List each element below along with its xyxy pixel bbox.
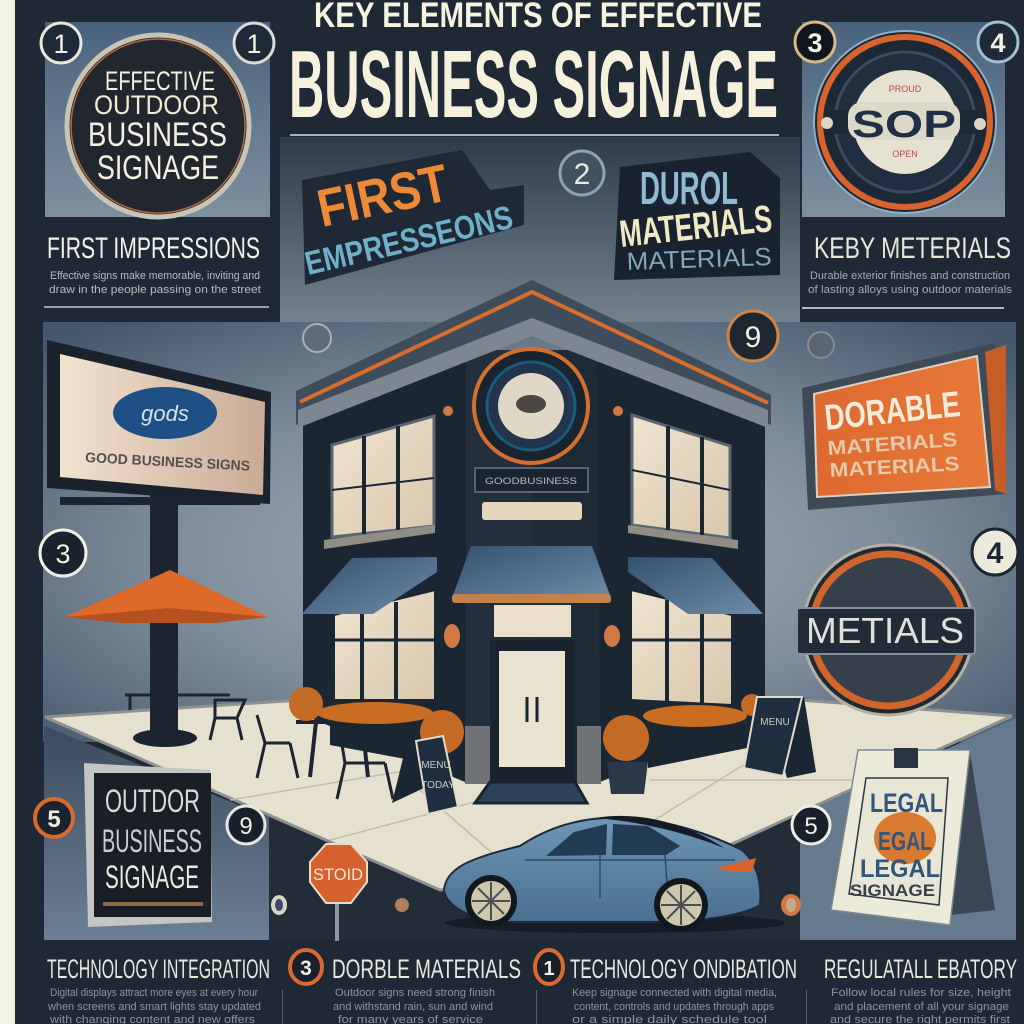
a-frame sign left: MENU xyxy=(421,760,451,771)
emblem: shop seal: OPEN xyxy=(892,149,918,159)
number badge 3 left: 3 xyxy=(55,539,71,569)
building walls xyxy=(303,362,765,782)
planter left xyxy=(289,687,465,770)
sign: first impressions: EMPRESSEONS xyxy=(301,198,516,282)
emblem: shop seal: SOP xyxy=(852,104,956,146)
column divider xyxy=(536,990,537,1024)
body text: of lasting alloys using outdoor materials xyxy=(808,284,1013,296)
awning left xyxy=(302,557,437,614)
car xyxy=(444,816,785,933)
body text: Durable exterior finishes and construction xyxy=(810,270,1010,282)
sign: durable materials: MATERIALS xyxy=(618,198,774,256)
board text: GOOD BUSINESS SIGNS xyxy=(85,449,250,474)
title xyxy=(289,0,779,138)
sign: metials round xyxy=(797,545,975,715)
sign: legal signage a-frame: LEGAL xyxy=(860,855,940,883)
number badge 5 right: 5 xyxy=(804,813,818,840)
fascia sign: GOODBUSINESS xyxy=(485,476,577,486)
upper window left xyxy=(332,416,434,537)
oval logo xyxy=(113,387,217,439)
sign: legal signage a-frame: EGAL xyxy=(878,826,932,856)
a-frame sign right xyxy=(744,697,816,778)
panel: key materials xyxy=(795,22,1018,309)
emblem: effective outdoor business signage: SIGNAGE xyxy=(97,149,219,187)
column: regulatory: and placement of all your signage xyxy=(834,1001,1009,1013)
column divider xyxy=(282,990,283,1024)
door lines xyxy=(525,855,735,898)
panel: outdoor signage lower left xyxy=(44,726,269,940)
badge backdrop xyxy=(802,22,1005,217)
sign: durable materials: DUROL xyxy=(640,162,738,214)
corner shading left xyxy=(466,350,532,780)
car windows xyxy=(546,824,607,856)
sign: legal signage a-frame xyxy=(831,748,995,925)
emblem: effective outdoor business signage: EFFECTIVE xyxy=(105,66,215,96)
sign: durable materials orange: MATERIALS xyxy=(827,429,958,460)
emblem: effective outdoor business signage: BUSINESS xyxy=(88,116,227,154)
small bolt left xyxy=(303,324,331,352)
patio pavement xyxy=(45,700,1012,890)
small bolt right xyxy=(808,332,834,358)
sign: metials round: METIALS xyxy=(806,610,964,651)
sign: outdoor business signage xyxy=(84,763,212,927)
doormat xyxy=(475,782,587,803)
number badge 1 right: 1 xyxy=(246,29,262,59)
column: durable materials: Outdoor signs need strong finish xyxy=(335,987,495,999)
number badge 9: 9 xyxy=(239,813,253,840)
a-frame sign left xyxy=(392,736,458,814)
title rule xyxy=(290,134,779,136)
sign: durable materials orange xyxy=(802,343,1006,510)
sign: outdoor business signage: BUSINESS xyxy=(102,823,202,859)
fascia sign xyxy=(475,468,588,520)
sign: outdoor business signage: OUTDOR xyxy=(105,783,200,819)
awning right xyxy=(628,557,763,614)
number badge 5 left xyxy=(35,799,73,837)
sign: first impressions: FIRST xyxy=(312,154,454,239)
small bolts lower xyxy=(271,894,801,916)
body text xyxy=(49,270,261,296)
number badge 5 right xyxy=(792,806,830,844)
panel: lower right xyxy=(800,718,1016,940)
number badge 4 xyxy=(978,22,1018,62)
number badge 4 right xyxy=(972,529,1018,575)
body text: draw in the people passing on the street xyxy=(49,284,261,296)
column: regulatory xyxy=(824,954,1017,1024)
number badge 1 xyxy=(535,950,563,984)
number badge 1 right xyxy=(234,23,274,63)
panel: central backdrop xyxy=(280,137,800,327)
number badge 9 xyxy=(227,806,265,844)
window sill left xyxy=(324,525,435,549)
badge backdrop xyxy=(45,22,270,217)
number badge 9 top centre: 9 xyxy=(745,321,761,354)
panel: lower centre road xyxy=(269,814,800,940)
sign: durable materials: MATERIALS xyxy=(626,243,772,276)
outdoor furniture left xyxy=(125,695,393,799)
heading: FIRST IMPRESSIONS xyxy=(47,232,260,265)
stop sign: STOID xyxy=(313,865,363,884)
number badge 1: 1 xyxy=(543,958,555,980)
billboard xyxy=(47,340,271,747)
column: technology integration left: when screens and smart lights stay updated xyxy=(47,1001,261,1013)
wheels xyxy=(468,878,705,929)
number badge 2: 2 xyxy=(574,158,590,191)
emblem: effective outdoor business signage xyxy=(67,35,249,217)
number badge 3 left xyxy=(40,530,86,576)
sign: legal signage a-frame: SIGNAGE xyxy=(850,881,935,900)
number badge 9 top centre xyxy=(728,311,778,361)
number badge 5 left: 5 xyxy=(47,806,61,833)
sign: durable materials xyxy=(614,152,780,280)
a-frame sign right: MENU xyxy=(760,717,790,728)
emblem: shop seal xyxy=(814,31,996,213)
door xyxy=(490,604,575,780)
number badge 3: 3 xyxy=(807,28,823,58)
awning centre xyxy=(452,546,611,603)
pavement joints xyxy=(230,730,860,860)
column: technology ondination: Keep signage connected with digital media, xyxy=(572,987,777,999)
number badge 4 right: 4 xyxy=(987,537,1004,570)
column divider xyxy=(806,990,807,1024)
number badge 3 xyxy=(795,22,835,62)
number badge 1 left xyxy=(41,23,81,63)
patio umbrella xyxy=(65,570,268,623)
wall lamps xyxy=(443,406,623,648)
billboard: gods xyxy=(141,401,189,426)
stop sign xyxy=(310,844,367,941)
sign: durable materials orange: DORABLE xyxy=(823,383,962,438)
sign: legal signage a-frame: LEGAL xyxy=(870,788,943,818)
lower window left xyxy=(334,590,435,700)
column: regulatory: Follow local rules for size, height xyxy=(831,987,1011,999)
number badge 3: 3 xyxy=(300,957,312,980)
pole xyxy=(150,495,178,735)
tail light xyxy=(716,858,756,872)
pole base xyxy=(133,729,197,747)
wheel spokes xyxy=(472,882,701,925)
lower window right xyxy=(631,590,732,705)
column: durable materials xyxy=(290,950,521,1024)
number badge 3 xyxy=(290,950,322,984)
number badge 4: 4 xyxy=(990,28,1006,58)
column: technology ondination: TECHNOLOGY ONDIBATION xyxy=(570,954,797,984)
panel: mid scene backdrop xyxy=(43,322,1016,742)
sign: durable materials orange: MATERIALS xyxy=(829,453,960,482)
number badge 2 xyxy=(560,151,604,195)
sign: outdoor business signage: SIGNAGE xyxy=(105,859,199,895)
board xyxy=(47,340,271,504)
panel: first impressions xyxy=(41,22,274,308)
planter right xyxy=(603,694,763,794)
window sill right xyxy=(628,525,738,549)
round roof sign xyxy=(474,349,588,463)
side stone base xyxy=(465,726,601,784)
emblem: effective outdoor business signage: OUTDOOR xyxy=(94,90,219,120)
column: technology integration left: Digital displays attract more eyes at every hour xyxy=(50,987,258,999)
upper window right xyxy=(632,415,730,538)
emblem: shop seal: PROUD xyxy=(889,84,922,94)
column: technology integration left: TECHNOLOGY INTEGRATION xyxy=(47,954,270,984)
column: durable materials: and withstand rain, sun and wind xyxy=(333,1001,493,1013)
column: durable materials: DORBLE MATERIALS xyxy=(332,954,521,984)
left paper edge xyxy=(0,0,15,1024)
body text: Effective signs make memorable, inviting and xyxy=(50,270,260,282)
roof xyxy=(296,280,771,425)
column: technology ondination xyxy=(535,950,797,1024)
sign: first impressions xyxy=(301,150,524,285)
column: technology ondination: content, controls and updates through apps xyxy=(574,1001,774,1013)
a-frame sign left: TODAY xyxy=(421,780,455,791)
catwalk xyxy=(60,497,260,505)
building xyxy=(296,280,771,803)
bottom band xyxy=(15,942,1024,1024)
number badge 1 left: 1 xyxy=(53,29,69,59)
body text xyxy=(808,270,1013,296)
column: technology integration left xyxy=(47,954,270,1024)
